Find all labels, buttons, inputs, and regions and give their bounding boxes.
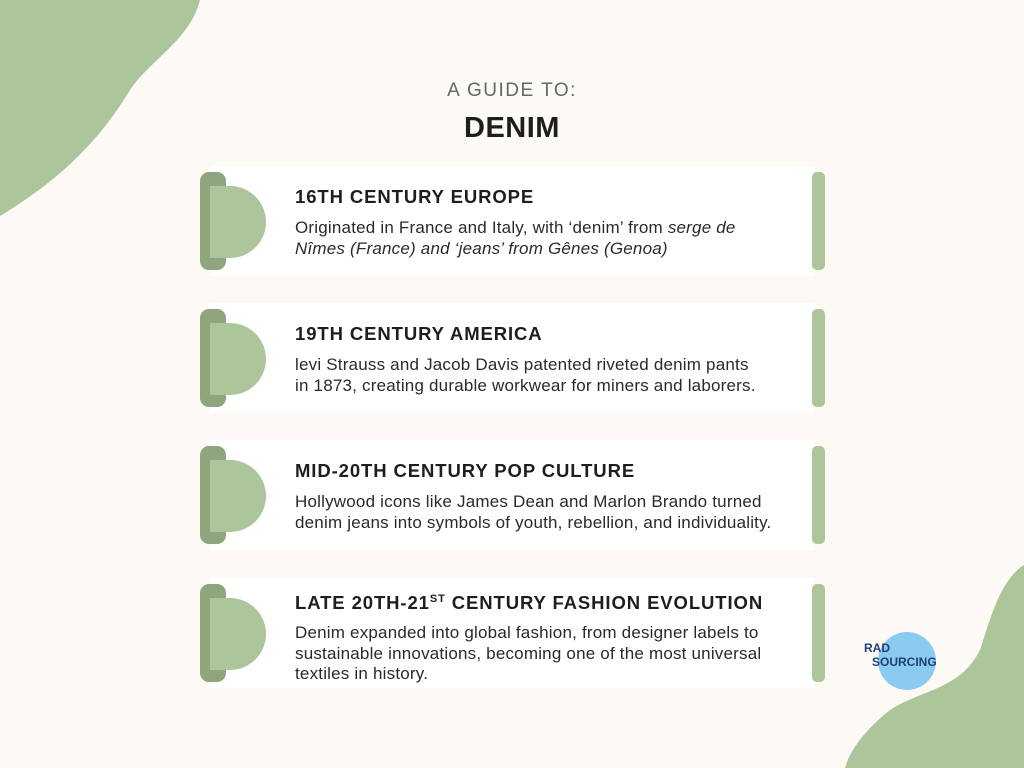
panel: mid-20th: MID-20TH CENTURY POP CULTURE [295,460,635,481]
logo: RAD sourcing: SOURCING [872,655,937,669]
logo: RAD sourcing [878,632,936,690]
subtitle: A GUIDE TO: [447,80,577,101]
panel: 19th century [200,303,825,413]
decorative blob bottom-right [845,565,1024,768]
title: DENIM [464,112,560,144]
text: RAD [864,641,890,655]
panel: 19th century: levi Strauss and Jacob Davis patented riveted denim pants in 1873, creating durable workwear for miners and laborers. [295,355,756,394]
panel: 16th century [200,166,825,276]
panel: late 20th-21st [200,578,825,688]
decorative blob top-left [0,0,200,216]
panel: 16th century: Originated in France and Italy, with ‘denim’ from serge de Nîmes (France) and ‘jeans’ from Gênes (Genoa) [295,218,736,258]
panel: late 20th-21st: Denim expanded into global fashion, from designer labels to sustainable innovations, becoming one of the most universal textiles in history. [295,623,761,683]
panel: late 20th-21st: LATE 20TH-21ST CENTURY FASHION EVOLUTION [295,592,763,613]
panel: mid-20th: Hollywood icons like James Dean and Marlon Brando turned denim jeans into symbols of youth, rebellion, and individuality. [295,492,771,532]
panel: 16th century: 16TH CENTURY EUROPE [295,186,534,207]
panel: 19th century: 19TH CENTURY AMERICA [295,323,543,344]
panel: mid-20th [200,440,825,550]
